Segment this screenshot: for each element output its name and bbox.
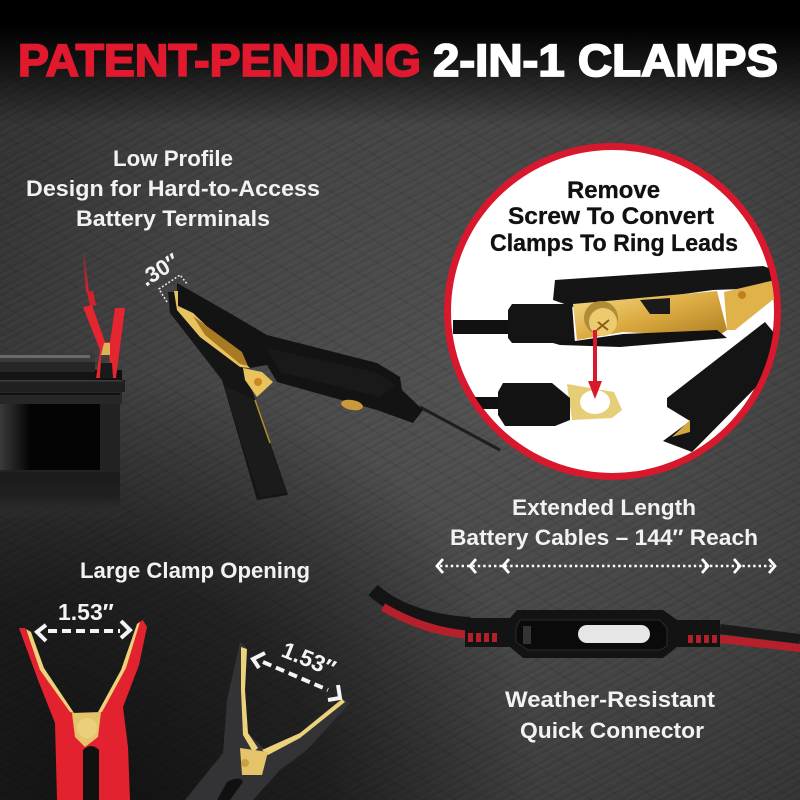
lower jaw bbox=[663, 322, 780, 452]
thin cable from clamp to callout bbox=[420, 407, 500, 450]
text: low profile caption: Battery Terminals bbox=[76, 206, 270, 231]
red clamp detail bbox=[82, 248, 125, 378]
title bbox=[18, 35, 778, 86]
text: weather resistant caption: Quick Connector bbox=[520, 718, 704, 743]
lower jaw bbox=[168, 292, 288, 500]
gold jaw bbox=[174, 291, 250, 368]
dimension: 1.53 inch black clamp: 1.53″ bbox=[278, 637, 340, 682]
dimension: 1.53 inch red clamp: 1.53″ bbox=[58, 599, 114, 625]
callout text: Remove bbox=[567, 177, 660, 204]
clamp close-up bbox=[453, 266, 780, 452]
quick connector with cables bbox=[373, 590, 800, 658]
large black clamp bbox=[168, 283, 423, 500]
text: low profile caption: Low Profile bbox=[113, 146, 233, 171]
dimension: .30 inch tip: .30″ bbox=[135, 248, 184, 291]
text: low profile caption bbox=[26, 146, 320, 231]
title: 2-IN-1 CLAMPS bbox=[433, 35, 778, 86]
text: extended length caption: Extended Length bbox=[512, 495, 696, 520]
arrow: screw to ring bbox=[588, 330, 602, 399]
text: extended length caption bbox=[450, 495, 758, 550]
text: large clamp opening caption: Large Clamp Opening bbox=[80, 558, 310, 583]
black clamp opening bbox=[185, 642, 350, 800]
dimension: 1.53 inch red clamp bbox=[37, 599, 130, 641]
battery with red clamp on terminal bbox=[0, 248, 125, 520]
callout text bbox=[490, 177, 738, 257]
arrow: cable reach dotted bbox=[437, 559, 775, 573]
text: low profile caption: Design for Hard-to-Access bbox=[26, 176, 320, 201]
text: weather resistant caption bbox=[505, 687, 716, 743]
title: PATENT-PENDING bbox=[18, 35, 421, 86]
text: weather resistant caption: Weather-Resistant bbox=[505, 687, 716, 712]
text: extended length caption: Battery Cables – 144″ Reach bbox=[450, 525, 758, 550]
callout circle: convert clamps to ring leads bbox=[448, 146, 780, 476]
ring lead bbox=[470, 383, 622, 426]
red clamp opening bbox=[19, 620, 147, 800]
callout text: Clamps To Ring Leads bbox=[490, 230, 738, 257]
dimension: 1.53 inch black clamp bbox=[253, 637, 340, 700]
callout text: Screw To Convert bbox=[508, 203, 714, 230]
upper jaw bbox=[177, 283, 423, 423]
